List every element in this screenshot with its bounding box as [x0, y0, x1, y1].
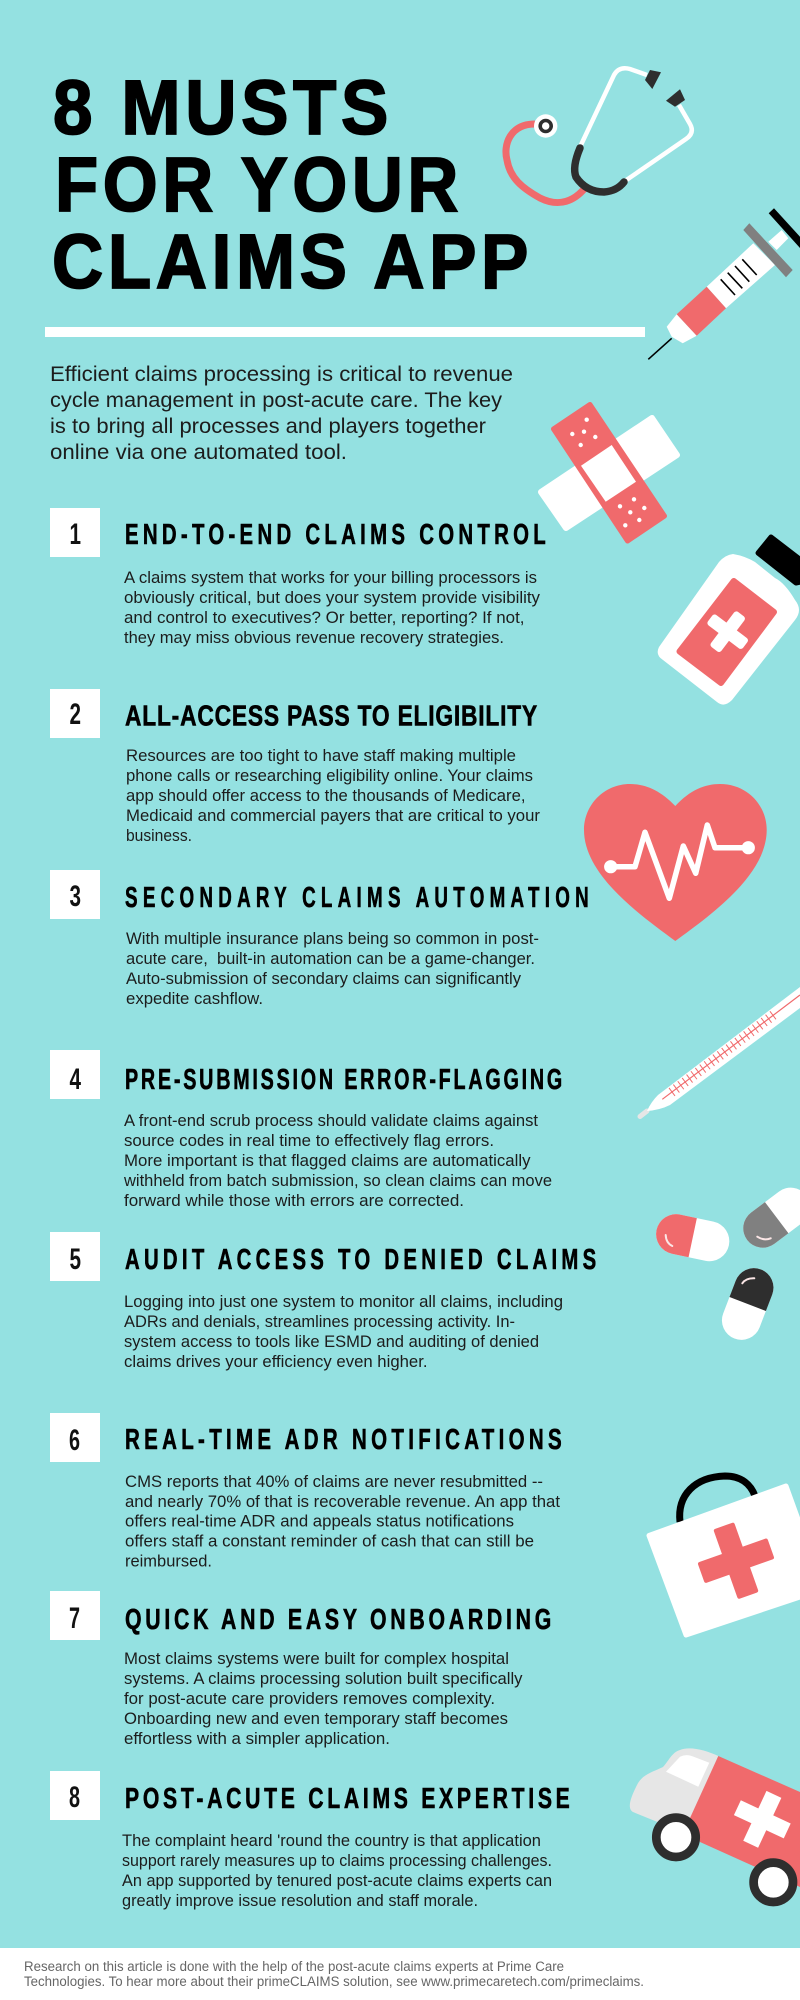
icon: first aid kit — [649, 1476, 800, 1635]
footer text: Technologies. To hear more about their primeCLAIMS solution, see www.primecaretech.com/primeclaims. — [24, 1974, 644, 1989]
body text 6: offers real-time ADR and appeals status notifications — [125, 1512, 514, 1530]
body text 2: business. — [126, 826, 192, 845]
body text 3: expedite cashflow. — [126, 989, 263, 1008]
body text 8 — [122, 1831, 552, 1910]
body text 2 — [126, 746, 540, 845]
title: 8 MUSTS — [53, 65, 393, 151]
panel: item 3 — [50, 870, 594, 1008]
title: FOR YOUR — [55, 142, 463, 228]
body text 4: More important is that flagged claims are automatically — [124, 1151, 531, 1170]
body text 1: obviously critical, but does your system provide visibility — [124, 588, 540, 607]
body text 6: offers staff a constant reminder of cash that can still be — [125, 1532, 534, 1550]
body text 5: claims drives your efficiency even higher. — [124, 1352, 428, 1371]
body text 1: and control to executives? Or better, reporting? If not, — [124, 608, 524, 627]
body text 4: A front-end scrub process should validate claims against — [124, 1111, 538, 1130]
footer text: Research on this article is done with the help of the post-acute claims experts at Prime Care — [24, 1959, 564, 1974]
body text 8: An app supported by tenured post-acute claims experts can — [122, 1871, 552, 1890]
number badge 8: 8 — [69, 1781, 80, 1814]
body text 6: and nearly 70% of that is recoverable revenue. An app that — [125, 1492, 560, 1511]
body text 4: source codes in real time to effectively flag errors. — [124, 1131, 494, 1150]
body text 3: Auto-submission of secondary claims can significantly — [126, 969, 521, 988]
body text 7: Most claims systems were built for complex hospital — [124, 1649, 509, 1668]
number badge 1 — [50, 508, 100, 557]
number badge 6: 6 — [69, 1424, 80, 1457]
body text 1 — [124, 568, 540, 647]
heading 5: AUDIT ACCESS TO DENIED CLAIMS — [125, 1244, 600, 1276]
panel: item 2 — [50, 689, 540, 845]
title: CLAIMS APP — [52, 219, 533, 305]
body text 8: greatly improve issue resolution and staff morale. — [122, 1891, 478, 1910]
icon: syringe — [648, 208, 800, 359]
number badge 2 — [50, 689, 100, 738]
body text 2: phone calls or researching eligibility online. Your claims — [126, 766, 533, 785]
panel: item 8 — [50, 1771, 574, 1910]
body text 2: Medicaid and commercial payers that are critical to your — [126, 806, 540, 825]
body text 5 — [124, 1292, 563, 1371]
body text 4 — [123, 1111, 552, 1210]
number badge 5 — [50, 1232, 100, 1281]
number badge 7: 7 — [69, 1602, 80, 1635]
body text 3: With multiple insurance plans being so common in post- — [126, 929, 539, 948]
number badge 4 — [50, 1050, 100, 1099]
intro text — [50, 363, 513, 464]
title — [52, 65, 533, 305]
number badge 3: 3 — [70, 880, 81, 913]
footer text — [24, 1959, 644, 1989]
number badge 5: 5 — [70, 1243, 81, 1276]
body text 7: Onboarding new and even temporary staff becomes — [124, 1709, 508, 1728]
body text 7 — [124, 1649, 523, 1748]
icon: medicine bottle — [658, 537, 800, 705]
heading 6: REAL-TIME ADR NOTIFICATIONS — [125, 1424, 566, 1456]
body text 7: for post-acute care providers removes complexity. — [124, 1689, 495, 1708]
panel: item 7 — [50, 1591, 555, 1748]
panel: item 6 — [50, 1413, 566, 1570]
body text 5: system access to tools like ESMD and auditing of denied — [124, 1332, 539, 1351]
body text 8: The complaint heard 'round the country is that application — [122, 1831, 541, 1850]
body text 3: acute care, built-in automation can be a game-changer. — [126, 949, 535, 968]
panel: item 5 — [50, 1232, 600, 1371]
heading 7: QUICK AND EASY ONBOARDING — [125, 1604, 555, 1636]
body text 4: withheld from batch submission, so clean claims can move — [123, 1171, 552, 1190]
number badge 2: 2 — [70, 698, 81, 731]
body text 4: forward while those with errors are corrected. — [124, 1191, 464, 1210]
heading 2: ALL-ACCESS PASS TO ELIGIBILITY — [125, 700, 538, 732]
intro text: cycle management in post-acute care. The key — [50, 389, 503, 412]
body text 8: support rarely measures up to claims processing challenges. — [122, 1851, 552, 1870]
body text 1: A claims system that works for your billing processors is — [124, 568, 537, 587]
icon: bandage — [541, 404, 677, 541]
panel: item 4 — [50, 1050, 565, 1210]
number badge 6 — [50, 1413, 100, 1462]
number badge 3 — [50, 870, 100, 919]
body text 3 — [126, 929, 539, 1008]
heading 4: PRE-SUBMISSION ERROR-FLAGGING — [125, 1064, 565, 1096]
body text 2: Resources are too tight to have staff making multiple — [126, 746, 516, 765]
number badge 7 — [50, 1591, 100, 1640]
body text 6 — [125, 1472, 560, 1570]
body text 7: effortless with a simpler application. — [124, 1729, 390, 1748]
heading 8: POST-ACUTE CLAIMS EXPERTISE — [125, 1783, 574, 1815]
number badge 1: 1 — [70, 518, 81, 551]
number badge 4: 4 — [70, 1063, 81, 1096]
number badge 8 — [50, 1771, 100, 1820]
panel: item 1 — [50, 508, 550, 647]
intro text: is to bring all processes and players together — [50, 415, 486, 438]
icon: heart with pulse — [584, 784, 767, 941]
body text 5: ADRs and denials, streamlines processing activity. In- — [124, 1312, 515, 1331]
icon: stethoscope — [506, 68, 692, 203]
icon: ambulance — [630, 1748, 800, 1902]
body text 5: Logging into just one system to monitor all claims, including — [124, 1292, 563, 1311]
body text 6: CMS reports that 40% of claims are never resubmitted -- — [125, 1472, 543, 1491]
body text 6: reimbursed. — [125, 1552, 212, 1570]
intro text: Efficient claims processing is critical to revenue — [50, 363, 513, 386]
icon: pills — [652, 1180, 800, 1346]
icon: thermometer — [640, 987, 800, 1116]
footer panel — [0, 1948, 800, 2000]
body text 2: app should offer access to the thousands of Medicare, — [126, 786, 526, 805]
body text 1: they may miss obvious revenue recovery strategies. — [124, 628, 504, 647]
body text 7: systems. A claims processing solution built specifically — [124, 1669, 523, 1688]
intro text: online via one automated tool. — [50, 441, 347, 464]
heading 1: END-TO-END CLAIMS CONTROL — [125, 519, 550, 551]
